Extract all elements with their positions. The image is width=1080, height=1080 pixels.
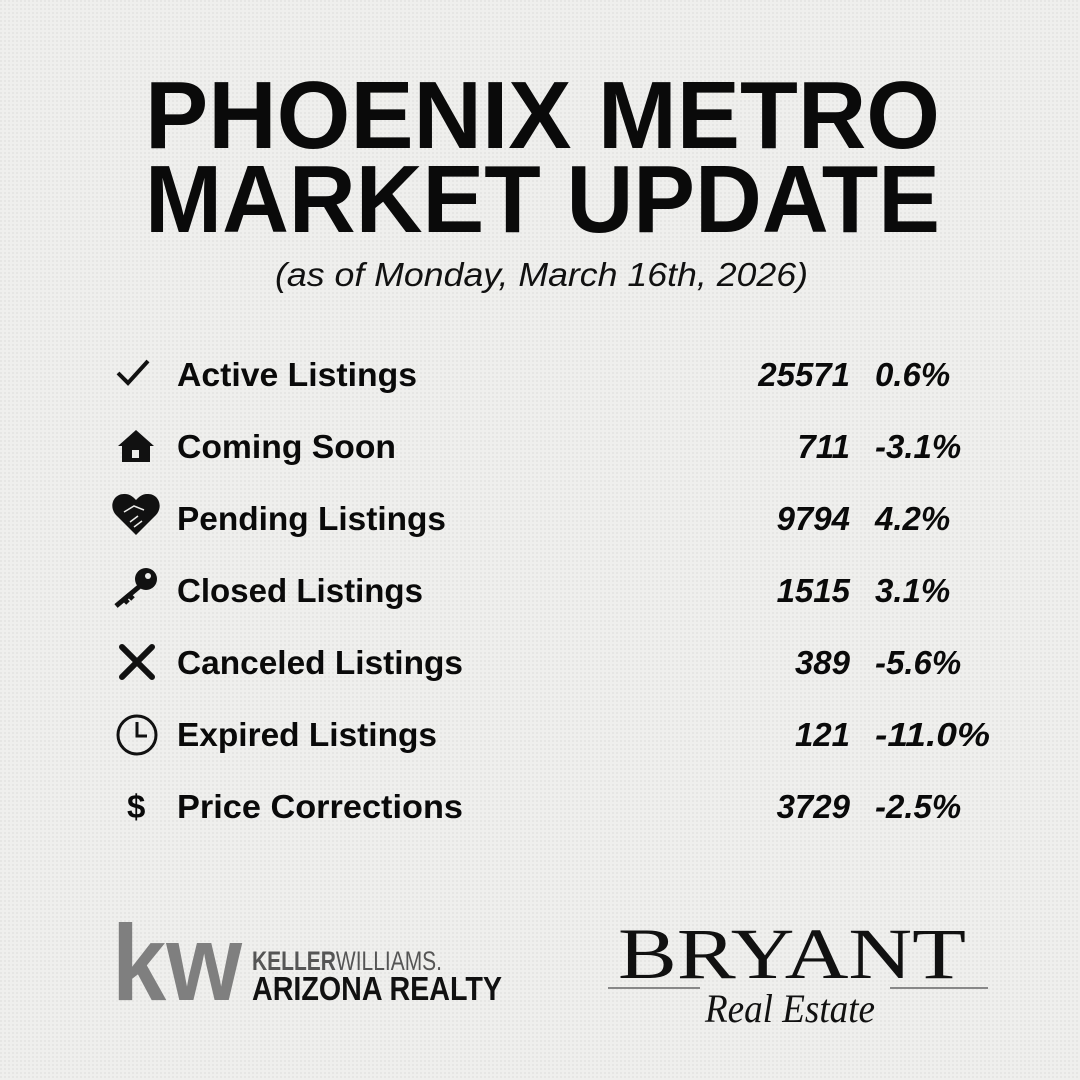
row: active listings: Active Listings: [177, 356, 417, 393]
row: price corrections: Price Corrections: [177, 788, 463, 825]
title: PHOENIX METRO: [145, 62, 940, 169]
row: coming soon: Coming Soon: [177, 428, 396, 465]
row: closed listings: 1515: [777, 572, 851, 609]
row: active listings: 25571: [757, 356, 850, 393]
stats table: [112, 356, 990, 825]
row: coming soon: -3.1%: [875, 428, 961, 465]
row: active listings: [118, 356, 950, 393]
row: price corrections: $: [127, 788, 145, 825]
row: pending listings: Pending Listings: [177, 500, 446, 537]
row: price corrections: -2.5%: [875, 788, 961, 825]
logo: bryant real estate: [608, 914, 988, 1031]
row: active listings: 0.6%: [875, 356, 950, 393]
row: coming soon: 711: [797, 428, 850, 465]
row: closed listings: [116, 568, 950, 609]
subtitle: (as of Monday, March 16th, 2026): [275, 256, 808, 293]
row: pending listings: [112, 494, 950, 537]
logo: keller williams: ARIZONA REALTY: [252, 970, 502, 1007]
row: expired listings: 121: [795, 716, 850, 753]
row: canceled listings: [122, 644, 961, 681]
row: pending listings: 9794: [777, 500, 850, 537]
row: canceled listings: Canceled Listings: [177, 644, 463, 681]
row: price corrections: 3729: [777, 788, 851, 825]
logo: keller williams: kw: [112, 902, 243, 1023]
logo: keller williams: [112, 902, 502, 1023]
logo: bryant real estate: Real Estate: [704, 986, 875, 1031]
title: [145, 62, 940, 253]
row: expired listings: -11.0%: [875, 716, 990, 753]
logo: keller williams: KELLERWILLIAMS.: [252, 946, 442, 976]
logo: bryant real estate: BRYANT: [618, 914, 966, 994]
row: price corrections: [127, 788, 961, 825]
row: canceled listings: 389: [795, 644, 851, 681]
row: pending listings: 4.2%: [874, 500, 950, 537]
title: MARKET UPDATE: [145, 146, 940, 253]
row: expired listings: Expired Listings: [177, 716, 437, 753]
row: coming soon: [118, 428, 961, 465]
row: expired listings: [118, 716, 990, 754]
row: closed listings: Closed Listings: [177, 572, 423, 609]
row: canceled listings: -5.6%: [875, 644, 961, 681]
row: closed listings: 3.1%: [875, 572, 950, 609]
